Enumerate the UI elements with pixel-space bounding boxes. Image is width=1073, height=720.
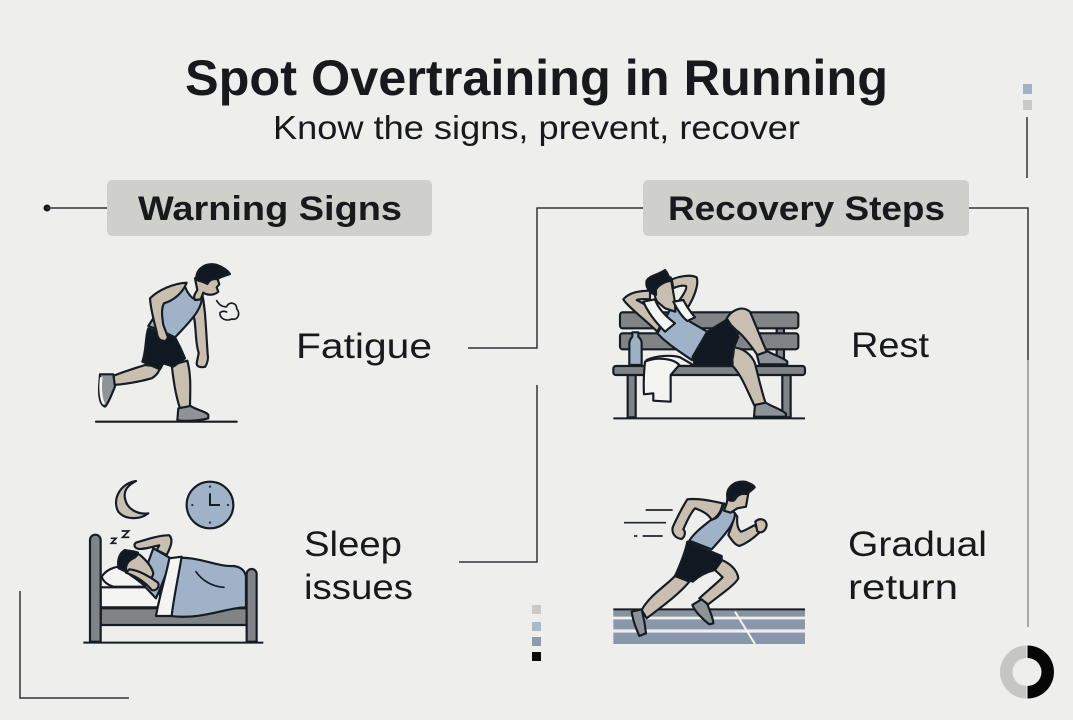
colour swatches top right bbox=[1023, 84, 1032, 110]
label: sleep issues: Sleep bbox=[304, 525, 402, 564]
icon: sprinting runner on track bbox=[613, 482, 805, 644]
heading panel: recovery steps bbox=[643, 180, 969, 236]
title: Spot Overtraining in Running bbox=[185, 50, 888, 106]
subtitle: Know the signs, prevent, recover bbox=[273, 109, 800, 146]
connector: fatigue to recovery steps bbox=[468, 208, 643, 348]
colour swatches bottom centre bbox=[532, 605, 541, 661]
icon: fatigued runner bbox=[96, 264, 239, 422]
label: gradual return: return bbox=[848, 568, 958, 607]
connector: sleep issues bbox=[459, 385, 537, 562]
corner bracket bottom left bbox=[20, 591, 129, 698]
label: sleep issues bbox=[304, 525, 413, 607]
connector: warning signs dot bbox=[44, 204, 107, 212]
label: gradual return bbox=[848, 525, 987, 607]
icon: resting on a bench bbox=[613, 270, 805, 418]
accent line top right bbox=[1026, 117, 1028, 178]
icon: sleepless in bed bbox=[83, 481, 263, 643]
label: sleep issues: issues bbox=[304, 568, 413, 607]
label: fatigue: Fatigue bbox=[296, 327, 432, 366]
connector: recovery steps to right edge bbox=[969, 208, 1028, 627]
label: rest: Rest bbox=[851, 326, 929, 365]
heading panel: warning signs bbox=[107, 180, 432, 236]
label: gradual return: Gradual bbox=[848, 525, 987, 564]
heading panel: warning signs: Warning Signs bbox=[138, 190, 402, 228]
donut mark bbox=[1000, 646, 1054, 698]
heading panel: recovery steps: Recovery Steps bbox=[668, 190, 945, 228]
